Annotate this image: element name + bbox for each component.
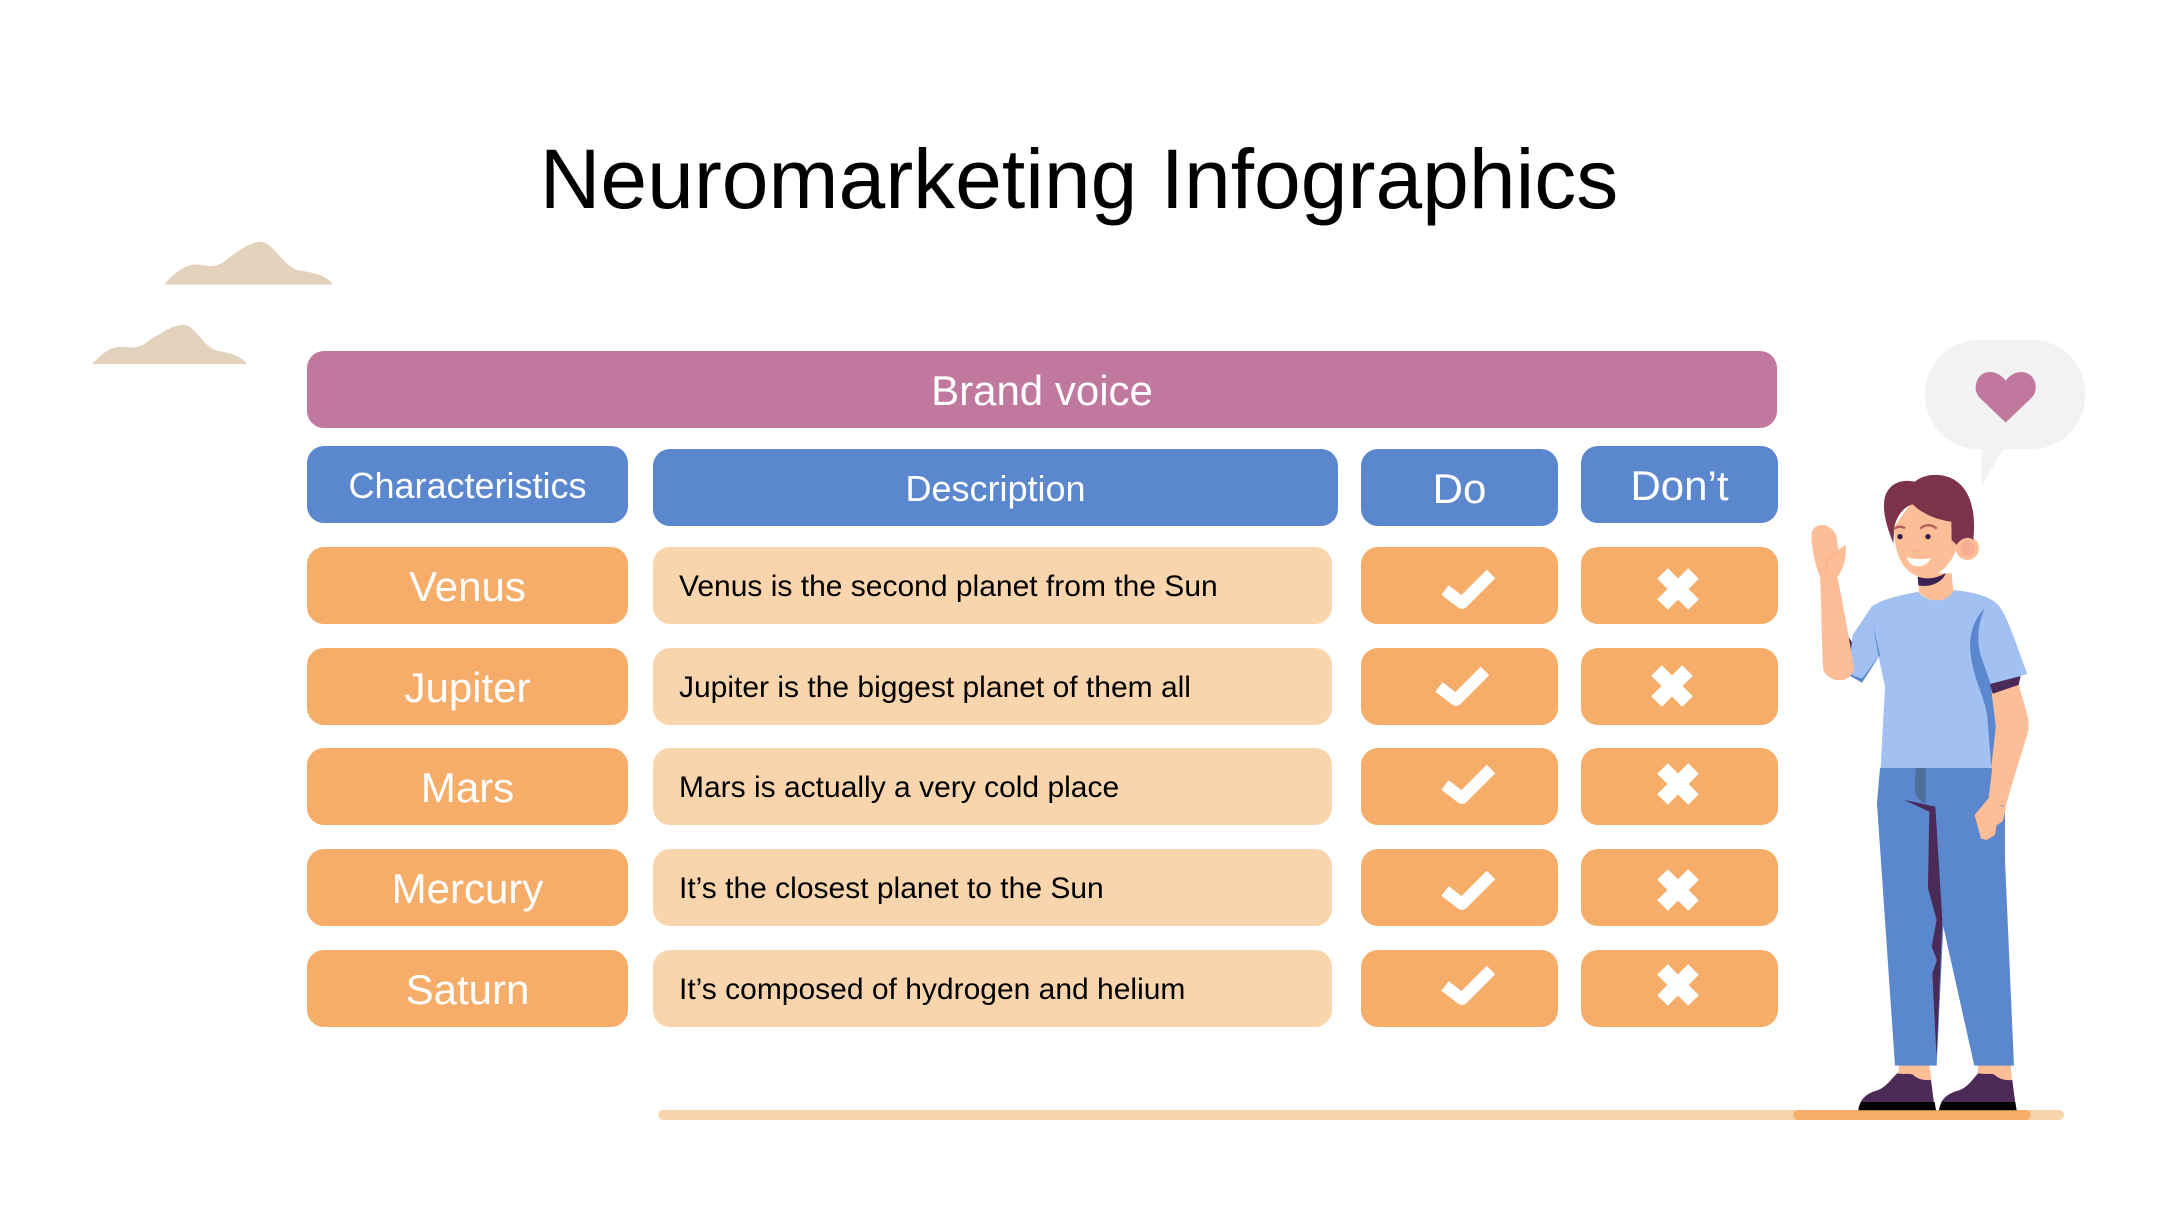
header: Don't bbox=[1581, 446, 1778, 523]
inseam bbox=[1904, 800, 1942, 1057]
row label: Mars: Mars bbox=[421, 764, 514, 811]
header: Do bbox=[1361, 449, 1558, 526]
row description: Saturn bbox=[653, 950, 1332, 1027]
do cell: Venus check bbox=[1361, 547, 1558, 624]
shoes bbox=[1860, 1073, 1934, 1103]
do cell: Mercury check bbox=[1361, 849, 1558, 926]
hair bbox=[1884, 475, 1974, 545]
shirt shade bbox=[1854, 608, 1996, 768]
row description: Venus bbox=[653, 547, 1332, 624]
table banner: Brand voice bbox=[307, 351, 1777, 428]
row label: Mercury: Mercury bbox=[392, 865, 543, 912]
row label: Mars bbox=[307, 748, 628, 825]
header: Don't: Don’t bbox=[1630, 462, 1729, 509]
row description: Mercury bbox=[653, 849, 1332, 926]
row label: Saturn: Saturn bbox=[406, 966, 529, 1013]
don't cell: Mercury cross bbox=[1581, 849, 1778, 926]
pants bbox=[1877, 768, 2014, 1066]
row description: Jupiter: Jupiter is the biggest planet of them all bbox=[679, 670, 1191, 704]
decorative clouds bbox=[92, 242, 332, 364]
header: Characteristics: Characteristics bbox=[348, 465, 587, 506]
header: Characteristics bbox=[307, 446, 628, 523]
row description: Saturn: It’s composed of hydrogen and helium bbox=[679, 972, 1185, 1006]
row label: Jupiter bbox=[307, 648, 628, 725]
ground line bbox=[658, 1110, 2064, 1120]
right arm bbox=[1978, 685, 2029, 830]
ankles bbox=[1897, 1065, 2012, 1082]
row description: Jupiter bbox=[653, 648, 1332, 725]
nose bbox=[1912, 550, 1921, 553]
row label: Mercury bbox=[307, 849, 628, 926]
head bbox=[1894, 500, 1957, 577]
header: Do: Do bbox=[1433, 465, 1486, 512]
row label: Saturn bbox=[307, 950, 628, 1027]
don't cell: Saturn cross bbox=[1581, 950, 1778, 1027]
row description: Mars: Mars is actually a very cold place bbox=[679, 770, 1119, 804]
far sleeve lining bbox=[1848, 637, 1862, 677]
header: Description: Description bbox=[905, 468, 1086, 509]
title: Neuromarketing Infographics bbox=[540, 132, 1618, 226]
smile bbox=[1907, 557, 1931, 566]
ground shadow under character bbox=[1793, 1110, 2031, 1120]
fly bbox=[1915, 768, 1926, 804]
row description: Mars bbox=[653, 748, 1332, 825]
waving arm bbox=[1811, 525, 1854, 680]
neck bbox=[1918, 573, 1953, 600]
header: Description bbox=[653, 449, 1338, 526]
do cell: Mars check bbox=[1361, 748, 1558, 825]
shirt bbox=[1848, 590, 2027, 768]
eyes bbox=[1897, 534, 1903, 539]
do cell: Jupiter check bbox=[1361, 648, 1558, 725]
speech bubble with heart bbox=[1925, 340, 2085, 485]
row label: Venus bbox=[307, 547, 628, 624]
hand bbox=[1975, 798, 2006, 840]
character bbox=[1812, 474, 2029, 1110]
table banner: Brand voice: Brand voice bbox=[931, 367, 1153, 414]
right sleeve lining bbox=[1990, 676, 2021, 694]
ear bbox=[1956, 537, 1979, 560]
row label: Venus: Venus bbox=[409, 563, 526, 610]
eyebrows bbox=[1894, 525, 1937, 529]
don't cell: Venus cross bbox=[1581, 547, 1778, 624]
row label: Jupiter: Jupiter bbox=[404, 664, 531, 711]
left sleeve bbox=[1848, 623, 1880, 683]
don't cell: Jupiter cross bbox=[1581, 648, 1778, 725]
row description: Mercury: It’s the closest planet to the Sun bbox=[679, 872, 1104, 904]
don't cell: Mars cross bbox=[1581, 748, 1778, 825]
do cell: Saturn check bbox=[1361, 950, 1558, 1027]
row description: Venus: Venus is the second planet from the Sun bbox=[679, 570, 1218, 602]
